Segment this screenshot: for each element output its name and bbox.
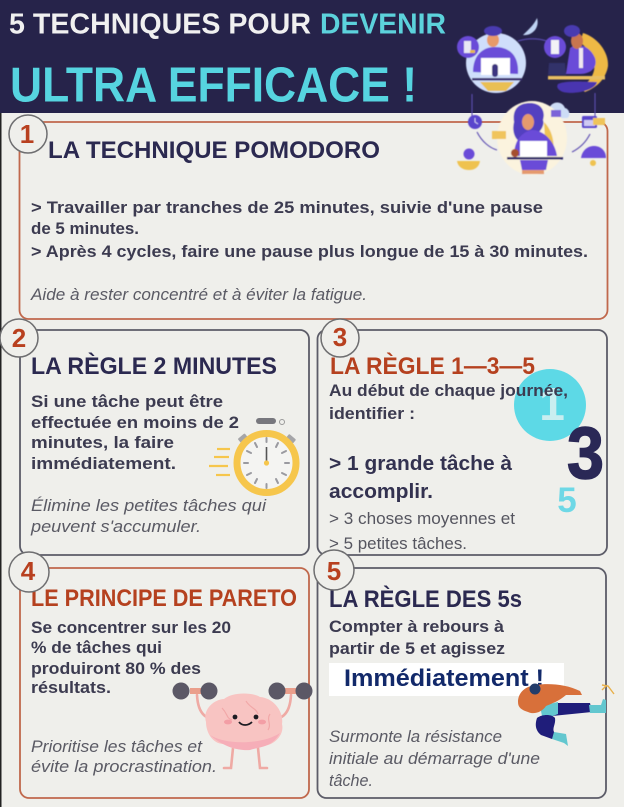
callout: immediatement [329, 663, 564, 696]
panel: technique 2 two minutes [20, 330, 309, 555]
text block: two minute rule [31, 392, 239, 473]
badge: number 3: 3 [333, 322, 347, 352]
text block: smaller tasks [329, 509, 515, 553]
title [9, 8, 446, 112]
callout: immediatement: Immédiatement ! [344, 665, 544, 692]
panel: technique 1 pomodoro [20, 122, 608, 319]
icon: cloud [541, 102, 569, 118]
text block: pareto benefit [31, 737, 217, 776]
panel: technique 3 rule 1-3-5 [318, 330, 607, 555]
text block: daily intro: Au début de chaque journée, [329, 381, 568, 400]
icon: top right person [544, 25, 608, 93]
text block: two minute rule: immédiatement. [31, 454, 176, 473]
icon: bottom person [497, 101, 567, 175]
text block: daily intro [329, 381, 568, 423]
icon: dome right [581, 146, 606, 166]
text block: pomodoro benefit: Aide à rester concentré et à éviter la fatigue. [30, 285, 367, 304]
text block: two minute benefit: Élimine les petites tâches qui [31, 496, 267, 515]
text block: two minute rule: minutes, la faire [31, 433, 174, 452]
text block: big task: accomplir. [329, 481, 433, 503]
text block: five second benefit: initiale au démarrage d'une [329, 749, 540, 768]
icon: connecting arrows [472, 39, 595, 152]
badge: number 2: 2 [12, 323, 26, 353]
heading: la technique pomodoro: LA TECHNIQUE POMODORO [48, 137, 380, 164]
panel: technique 5 five seconds [318, 568, 606, 798]
text block: pomodoro steps: > Après 4 cycles, faire une pause plus longue de 15 à 30 minutes. [31, 242, 588, 261]
heading: la regle 2 minutes: LA RÈGLE 2 MINUTES [31, 352, 277, 380]
badge: number 1: 1 [20, 119, 34, 149]
icon: calendar [582, 116, 605, 128]
heading: la regle des 5s: LA RÈGLE DES 5s [329, 585, 522, 613]
panel: header band [0, 0, 624, 113]
title: 5 TECHNIQUES POUR [9, 8, 311, 40]
text block: smaller tasks: > 5 petites tâches. [329, 534, 467, 553]
text block: two minute benefit: peuvent s'accumuler. [30, 517, 201, 536]
text block: daily intro: identifier : [329, 404, 415, 423]
icon: numbers 1 3 5: 3 [567, 413, 604, 494]
text block: pareto rule: % de tâches qui [31, 638, 162, 657]
badge: number 5 [314, 550, 354, 590]
heading: le principe de pareto: LE PRINCIPE DE PARETO [31, 585, 297, 612]
icon: stopwatch [209, 418, 296, 492]
text block: countdown: partir de 5 et agissez [329, 639, 505, 658]
text block: pareto benefit: évite la procrastination. [31, 757, 217, 776]
panel: technique 4 pareto [20, 568, 309, 798]
title: DEVENIR [320, 8, 446, 40]
text block: two minute rule: effectuée en moins de 2 [31, 413, 239, 432]
badge: number 5: 5 [327, 556, 341, 586]
badge: number 4: 4 [21, 556, 36, 586]
icon: clock [468, 115, 482, 129]
badge: number 1 [9, 115, 47, 153]
icon: numbers 1 3 5 [514, 369, 604, 520]
icon: moon shape [523, 18, 538, 35]
badge: number 2 [0, 319, 38, 357]
badge: number 3 [321, 319, 359, 357]
text block: countdown: Compter à rebours à [329, 617, 505, 636]
icon: envelope [492, 131, 506, 139]
text block: five second benefit: Surmonte la résistance [329, 727, 502, 746]
text block: big task: > 1 grande tâche à [329, 453, 513, 475]
text block: two minute benefit [30, 496, 267, 536]
heading: la regle 1-3-5: LA RÈGLE 1—3—5 [330, 352, 535, 380]
text block: pomodoro steps: > Travailler par tranches de 25 minutes, suivie d'une pause [31, 198, 543, 217]
text block: pomodoro steps [31, 198, 588, 261]
icon: pawn left [457, 148, 480, 170]
text block: two minute rule: Si une tâche peut être [31, 392, 223, 411]
text block: pareto benefit: Prioritise les tâches et [31, 737, 203, 756]
text block: smaller tasks: > 3 choses moyennes et [329, 509, 515, 528]
text block: five second benefit [329, 727, 540, 790]
icon: brain lifting dumbbells [172, 682, 312, 768]
text block: pomodoro steps: de 5 minutes. [31, 219, 139, 238]
icon: leaping wrestler [518, 684, 614, 746]
text block: five second benefit: tâche. [329, 771, 373, 790]
icon: top left person [457, 26, 526, 93]
icon: numbers 1 3 5: 1 [539, 378, 565, 430]
text block: countdown [329, 617, 505, 658]
text block: big task [329, 453, 513, 503]
text block: pareto rule [31, 618, 231, 697]
icon: numbers 1 3 5: 5 [557, 481, 577, 520]
badge: number 4 [9, 552, 49, 592]
text block: pareto rule: résultats. [31, 678, 111, 697]
text block: pareto rule: produiront 80 % des [31, 659, 201, 678]
text block: pareto rule: Se concentrer sur les 20 [31, 618, 231, 637]
icon: people working illustration [457, 18, 608, 175]
title: ULTRA EFFICACE ! [10, 58, 417, 112]
